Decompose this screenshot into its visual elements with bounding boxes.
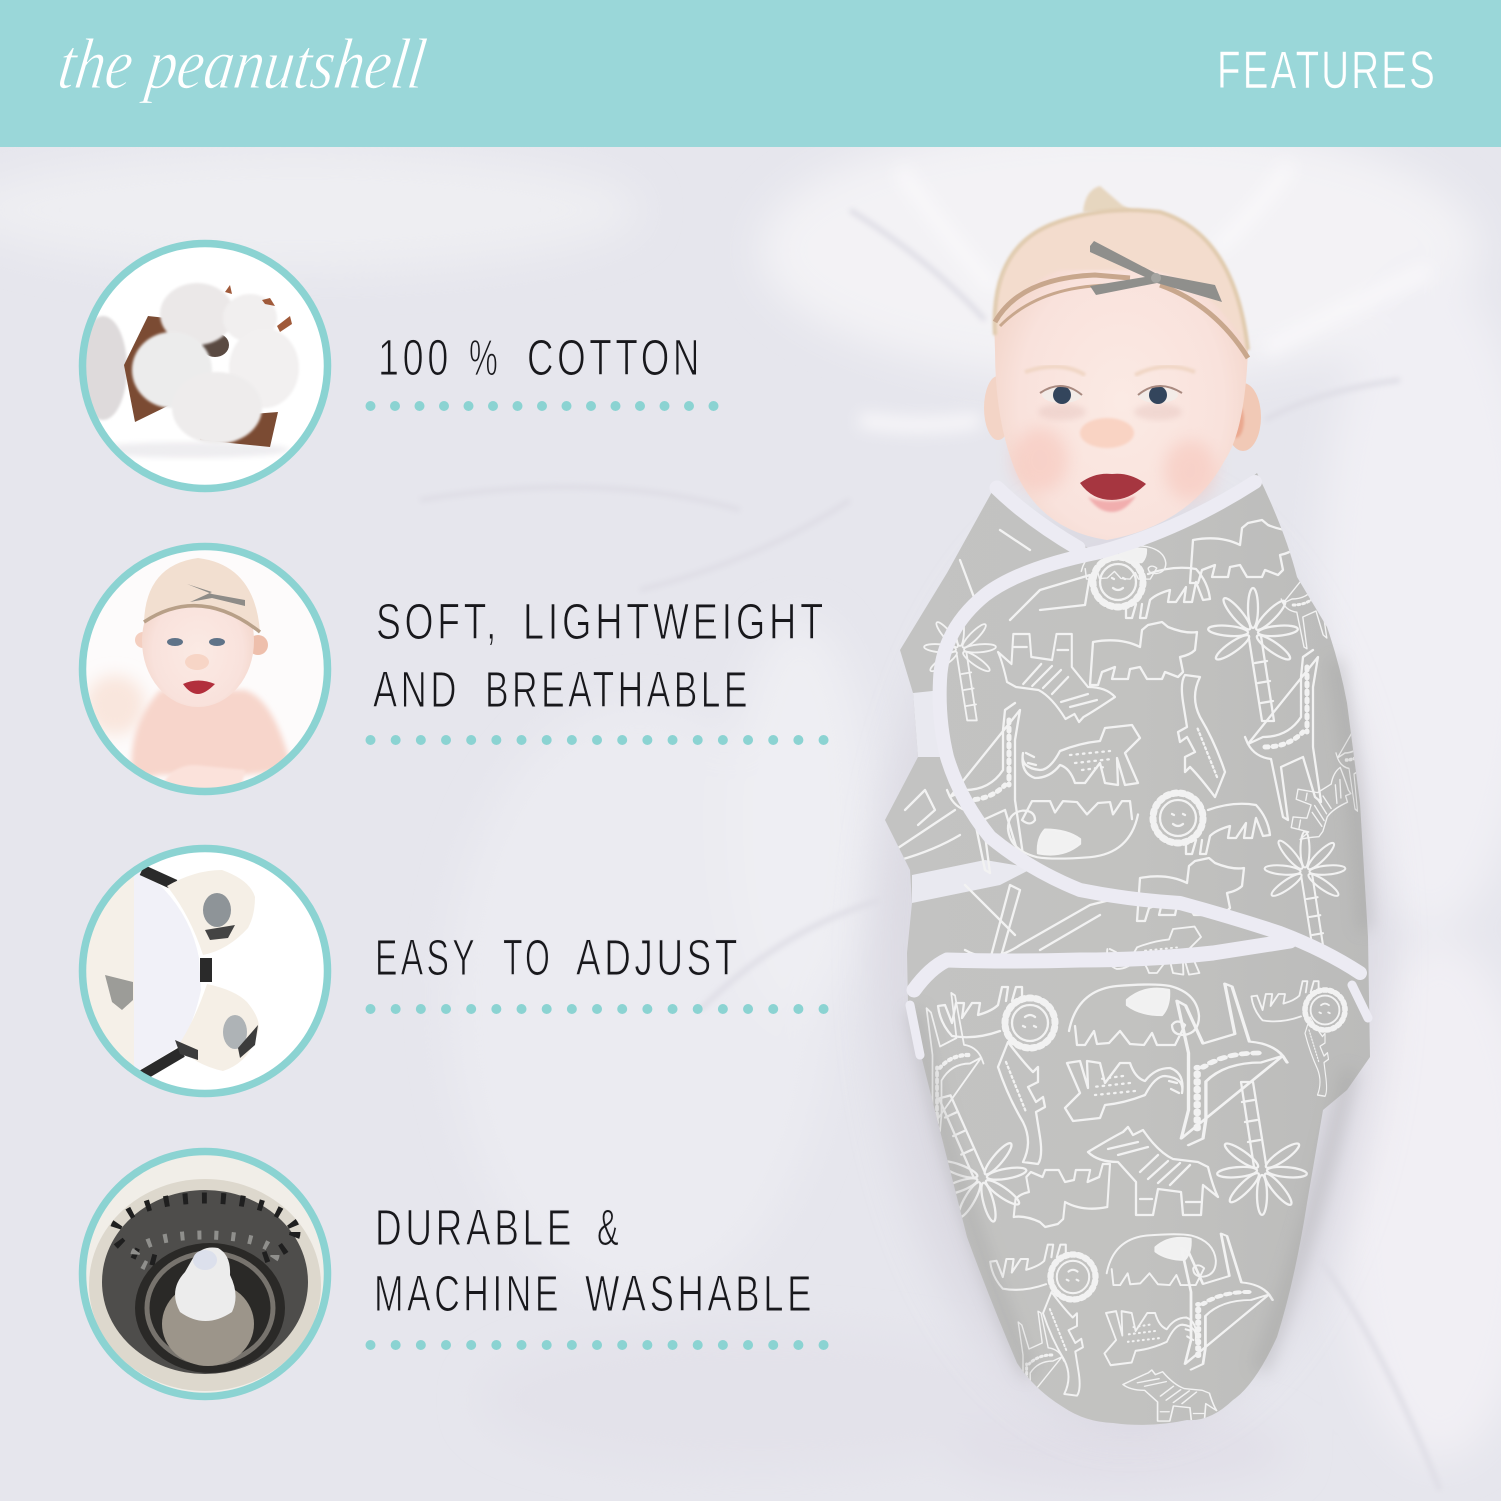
label: durable and machine washable: WASHABLE [585, 1265, 815, 1322]
feature 4: durable [82, 1152, 824, 1396]
label: 100% cotton: 100 [378, 329, 452, 386]
label: soft, lightweight and breathable: LIGHTWEIGHT [523, 593, 827, 650]
dotted divider [370, 1340, 824, 1350]
icon: washing machine drum photo [82, 1152, 328, 1396]
label: durable and machine washable: MACHINE [374, 1265, 562, 1322]
label: soft, lightweight and breathable [373, 593, 827, 718]
tucked flap undersides [912, 690, 1033, 903]
white binding edges [910, 482, 1368, 1055]
icon: swaddle fasteners photo [80, 845, 328, 1095]
label: soft, lightweight and breathable: AND [373, 661, 460, 718]
icon: baby photo [82, 546, 328, 795]
swaddle wrap [885, 473, 1374, 1425]
label: durable and machine washable [374, 1199, 815, 1322]
dotted divider [370, 1004, 824, 1014]
label: 100% cotton: % [469, 329, 501, 386]
dotted divider [370, 735, 824, 745]
label: soft, lightweight and breathable: BREATHABLE [485, 661, 751, 718]
brand logo: the peanutshell: the peanutshell [54, 24, 431, 104]
label: easy to adjust [375, 929, 741, 986]
label: 100% cotton: COTTON [527, 329, 703, 386]
label: soft, lightweight and breathable: SOFT, [376, 593, 500, 650]
baby head [984, 186, 1261, 540]
face [1012, 367, 1216, 512]
label: easy to adjust: EASY [375, 929, 478, 986]
label: easy to adjust: ADJUST [576, 929, 741, 986]
header bar [0, 0, 1501, 147]
label: durable and machine washable: DURABLE [375, 1199, 575, 1256]
icon: cotton boll photo [79, 244, 328, 488]
feature 2: soft [82, 546, 827, 795]
label: durable and machine washable: & [597, 1199, 622, 1256]
dotted divider [370, 401, 714, 411]
fabric shading [914, 660, 1365, 1375]
swaddled baby photo [885, 186, 1374, 1425]
animal line pattern [895, 520, 1374, 1421]
feature 1: cotton [79, 244, 714, 488]
label: 100% cotton [378, 329, 703, 386]
label: easy to adjust: TO [503, 929, 553, 986]
headband and bow [995, 241, 1248, 358]
feature 3: adjust [80, 845, 824, 1095]
